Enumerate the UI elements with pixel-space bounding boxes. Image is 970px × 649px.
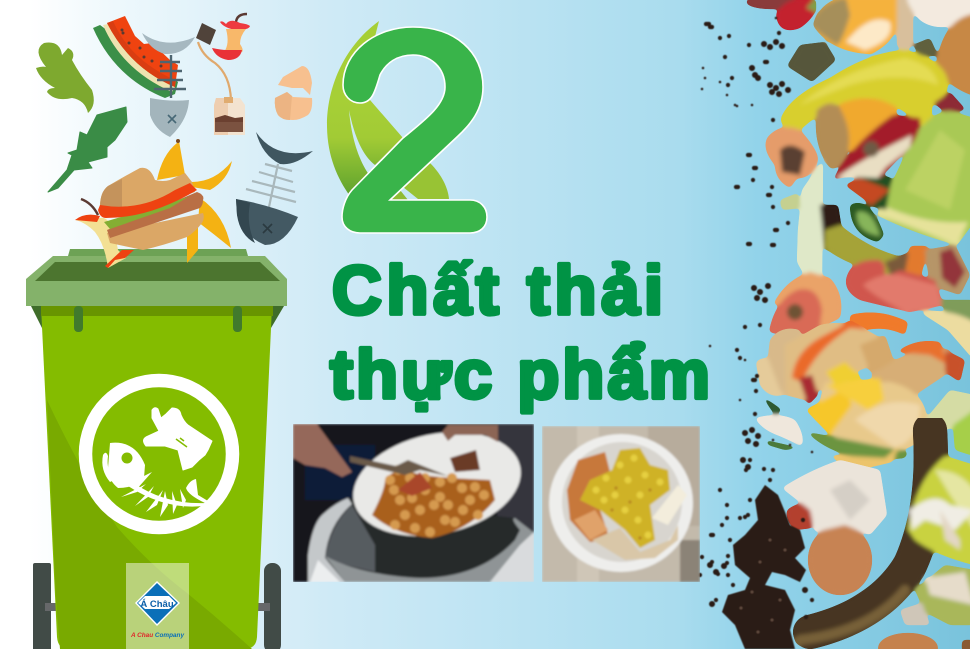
chickpeas <box>390 470 484 532</box>
photo: plate scraped into bin <box>293 417 534 582</box>
food <box>567 452 612 542</box>
sauce <box>372 471 495 538</box>
bowl <box>549 434 693 572</box>
icon: apple core or bone <box>144 408 212 470</box>
icon: watermelon slice <box>93 16 178 98</box>
lettuce <box>104 197 188 229</box>
bun <box>100 168 195 214</box>
icon: small grey fish bone <box>142 33 195 137</box>
apple core <box>75 218 126 268</box>
digit 2 <box>342 27 487 233</box>
icon: burger and apple core <box>75 168 204 268</box>
collage: upper scraps <box>746 0 970 360</box>
title line 2: thực phẩm <box>330 336 710 413</box>
plate <box>350 430 523 538</box>
bag <box>350 496 518 577</box>
hands <box>293 424 352 477</box>
fork <box>350 456 448 476</box>
patty <box>107 192 203 238</box>
number 2 with leaf <box>327 21 487 233</box>
collage: coffee-ground soil <box>700 18 812 649</box>
icon: dark fish bone <box>236 132 313 245</box>
collage: banana, eggs and skins <box>782 430 970 649</box>
bin body <box>41 306 273 649</box>
logo: Á Châu diamond: Á Châu <box>140 599 174 610</box>
icon: egg shell <box>275 66 312 120</box>
title: Chất thải thực phẩm <box>330 252 710 413</box>
bin hinges <box>31 306 284 332</box>
icon: oak leaf <box>36 42 94 113</box>
icon: tea bag <box>196 23 245 135</box>
photo: food in white bowl <box>542 426 700 582</box>
icon: banana peel <box>157 139 232 263</box>
collage: middle peels and citrus <box>755 320 970 472</box>
icon: fish skeleton <box>102 443 208 517</box>
green waste bin <box>26 249 287 649</box>
icon: apple core <box>212 14 250 60</box>
icon: food waste emblem <box>86 380 232 528</box>
wheels <box>33 563 281 649</box>
logo panel <box>126 563 189 649</box>
red layer <box>98 183 197 218</box>
icon: arugula leaf <box>48 107 127 192</box>
bin lid <box>26 249 287 306</box>
title line 1: Chất thải <box>332 252 663 329</box>
logo text: A Chau Company: A Chau Company <box>130 632 184 639</box>
food waste collage <box>700 0 970 649</box>
food chunks <box>398 472 432 496</box>
leaf behind number <box>327 21 449 200</box>
